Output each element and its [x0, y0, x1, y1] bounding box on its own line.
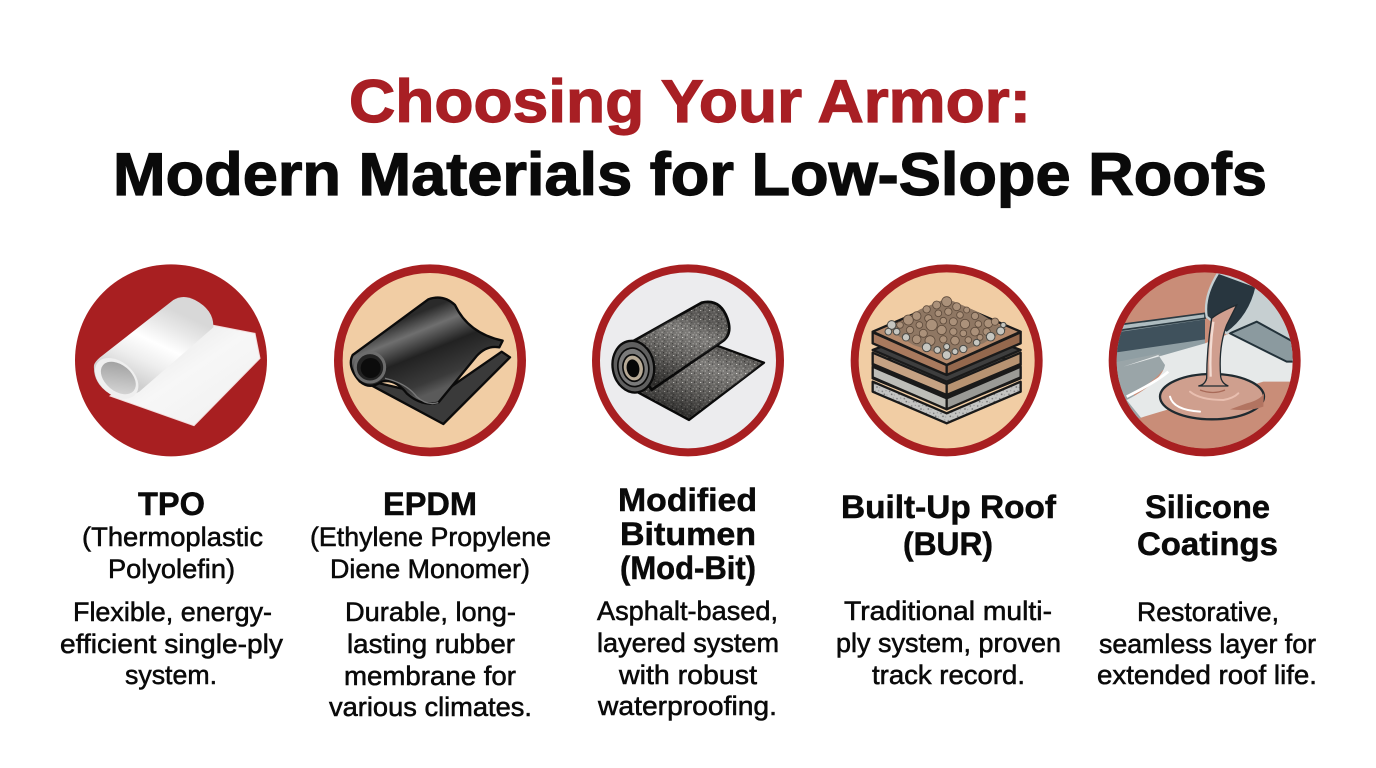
icon: layered built-up roof with gravel [855, 268, 1039, 452]
icon: silicone coating being poured [1110, 268, 1303, 463]
heading: Built-Up Roof (BUR) [841, 489, 1056, 562]
title line 2: Modern Materials for Low-Slope Roofs [113, 141, 1267, 208]
heading: Modified Bitumen (Mod-Bit): Modified [618, 482, 757, 518]
description: Modified Bitumen [597, 596, 779, 721]
description: Modified Bitumen: Asphalt-based, [597, 596, 778, 626]
description: Built-Up Roof: ply system, proven [836, 628, 1061, 658]
description: Built-Up Roof: Traditional multi- [844, 596, 1052, 626]
icon: granulated bitumen roll [596, 268, 780, 452]
description: Modified Bitumen: layered system [597, 628, 779, 658]
description: Built-Up Roof: track record. [872, 660, 1025, 690]
subtitle: Ethylene Propylene Diene Monomer: Diene Monomer) [330, 554, 530, 584]
description: Silicone Coatings: extended roof life. [1097, 660, 1317, 690]
description: Silicone Coatings: seamless layer for [1099, 629, 1316, 659]
heading: Silicone Coatings: Coatings [1137, 526, 1278, 562]
title line 1: Choosing Your Armor: [349, 68, 1031, 135]
description: Modified Bitumen: waterproofing. [597, 691, 777, 721]
title [113, 68, 1267, 208]
panel: Built-Up Roof [836, 268, 1061, 690]
subtitle: Thermoplastic Polyolefin: (Thermoplastic [82, 522, 263, 552]
description: Built-Up Roof [836, 596, 1061, 690]
description: EPDM: lasting rubber [347, 629, 515, 659]
heading: Modified Bitumen (Mod-Bit): Bitumen [620, 516, 756, 552]
infographic canvas [60, 77, 1316, 721]
panel: EPDM [310, 269, 551, 722]
description: TPO: Flexible, energy- [73, 597, 272, 627]
description: EPDM: Durable, long- [345, 597, 516, 627]
description: Silicone Coatings [1097, 597, 1317, 690]
heading: Modified Bitumen (Mod-Bit) [618, 482, 757, 586]
description: EPDM: various climates. [329, 692, 532, 722]
heading: Built-Up Roof (BUR): Built-Up Roof [841, 489, 1056, 525]
subtitle: Ethylene Propylene Diene Monomer: (Ethylene Propylene [310, 522, 551, 552]
panel: Modified Bitumen [596, 268, 780, 721]
panel: TPO [60, 264, 284, 690]
subtitle: Ethylene Propylene Diene Monomer [310, 522, 551, 584]
icon: white TPO membrane roll [75, 264, 267, 456]
heading: Modified Bitumen (Mod-Bit): (Mod-Bit) [620, 550, 756, 586]
subtitle: Thermoplastic Polyolefin [82, 522, 263, 584]
heading: TPO: TPO [138, 486, 205, 522]
description: Modified Bitumen: with robust [618, 660, 758, 690]
description: TPO: system. [125, 660, 217, 690]
subtitle: Thermoplastic Polyolefin: Polyolefin) [108, 554, 235, 584]
heading: Silicone Coatings [1137, 489, 1278, 562]
heading: Silicone Coatings: Silicone [1145, 489, 1270, 525]
description: TPO [60, 597, 284, 690]
description: Silicone Coatings: Restorative, [1137, 597, 1279, 627]
icon: black EPDM rubber roll [338, 269, 522, 452]
description: EPDM [329, 597, 532, 722]
description: EPDM: membrane for [344, 661, 516, 691]
description: TPO: efficient single-ply [60, 629, 284, 659]
heading: EPDM: EPDM [383, 486, 477, 522]
heading: Built-Up Roof (BUR): (BUR) [903, 526, 993, 562]
panel: Silicone Coatings [1097, 268, 1317, 690]
